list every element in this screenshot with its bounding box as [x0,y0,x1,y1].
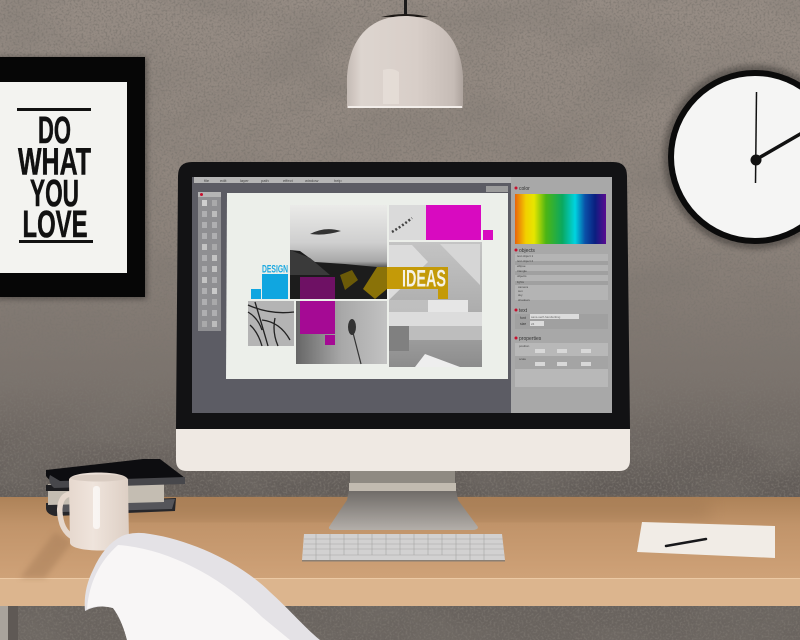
small texture photo [389,205,426,240]
menu bar: file [204,178,210,183]
poster text: YOU [30,173,79,215]
monitor [176,162,630,471]
paper sheet and pen [637,522,775,558]
menu bar: path [261,178,269,183]
objects section: triangle [517,269,527,273]
menu bar [194,177,512,183]
objects section: shadows [518,298,530,302]
objects section: sky [518,293,523,297]
wall clock [663,65,800,249]
blue design label [251,264,288,299]
objects section: objects [519,248,535,254]
framed poster [0,57,147,299]
plant photo [296,301,387,364]
gold ideas label: IDEAS [402,266,446,292]
text section: text [519,308,528,314]
design canvas [226,193,508,379]
menu bar: window [305,178,318,183]
text section [514,308,608,329]
objects section: camera [518,285,528,289]
branches photo [248,301,294,346]
properties section: scale [519,357,526,361]
clock hands [750,92,800,183]
color section: color [519,186,530,192]
objects section: lights [517,280,525,284]
desk [0,497,800,640]
menu bar: layer [240,178,249,183]
tool palette [198,192,221,331]
plum blocks [300,277,335,345]
poster text: DO [38,110,71,152]
text section: sans-serif-handwriting [531,315,561,319]
menu bar: help [334,178,342,183]
properties section [514,336,608,387]
main landscape photo [290,205,387,299]
blue design label: DESIGN [262,264,288,276]
magenta blocks [426,205,493,240]
gold ideas label [340,266,448,299]
objects section: ellipse [517,264,526,268]
right properties panel [511,177,612,413]
keyboard [302,534,505,562]
coffee mug [60,472,129,550]
objects section [514,248,608,302]
screen [192,177,612,413]
poster text [18,110,91,246]
pen [666,539,706,546]
text section: 24 [531,322,535,326]
objects section: text object 1 [517,254,534,258]
attic room photo [389,242,482,367]
monitor stand [329,471,478,530]
objects section: sun [518,289,523,293]
menu bar: effect [283,178,294,183]
color section [514,186,606,244]
text section: font [520,316,526,320]
objects section: text object 2 [517,259,534,263]
objects section: objects [517,274,527,278]
white chair [85,533,320,640]
pendant lamp [347,0,463,108]
properties section: position [519,344,530,348]
menu bar: edit [220,178,227,183]
poster text: LOVE [22,204,88,246]
text section: size [520,322,526,326]
poster text: WHAT [18,142,91,184]
properties section: properties [519,336,542,342]
stack of books [46,459,185,516]
